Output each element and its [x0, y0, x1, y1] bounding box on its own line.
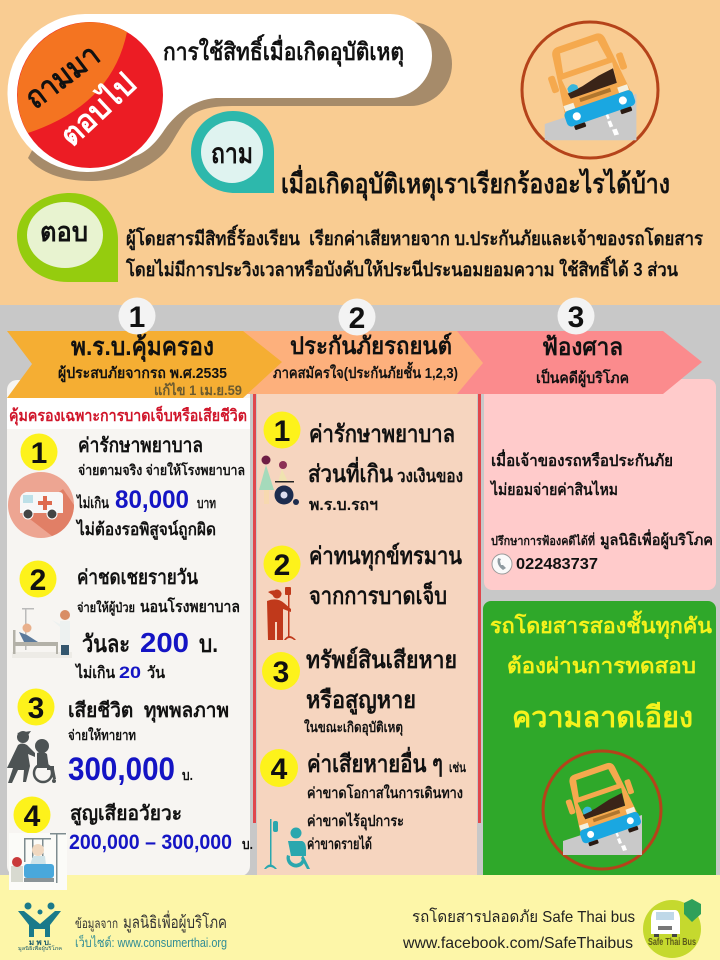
item 4 text: เช่น [449, 760, 466, 775]
item 1 text: ค่ารักษาพยาบาล [78, 435, 203, 457]
chevron: car insurance: ประกันภัยรถยนต์ [290, 332, 452, 360]
item 3 text: จ่ายให้ทายาท [68, 726, 136, 743]
item 3 text: หรือสูญหาย [306, 687, 416, 715]
item 4 text: ค่าเสียหายอื่น ๆ [307, 746, 443, 778]
item 2 text: 200 [140, 627, 189, 658]
item 1 number: 1 [274, 415, 290, 448]
item 3 number: 3 [28, 692, 44, 725]
chevron: protection act [7, 331, 282, 398]
icon: caregiver and wheelchair [7, 731, 56, 783]
top section background [0, 0, 720, 305]
source credit: มูลนิธิเพื่อผู้บริโภค [123, 910, 227, 933]
item 4 number [14, 796, 50, 834]
item 2 text: 20 [119, 663, 141, 682]
item 2 text [309, 542, 462, 610]
icon: patient with IV drip [267, 587, 296, 640]
chevron: protection act: ผู้ประสบภัยจากรถ พ.ศ.2535 [58, 365, 227, 383]
item 2 text: จ่ายให้ผู้ป่วย [77, 599, 135, 616]
number badge 2: 2 [349, 302, 365, 335]
number badge 1 [118, 298, 156, 334]
item 2 text: ค่าชดเชยรายวัน [77, 567, 198, 589]
campaign text: รถโดยสารปลอดภัย Safe Thai bus [412, 907, 635, 926]
foundation logo: ม พ บ. [29, 938, 51, 947]
item 3 text: ในขณะเกิดอุบัติเหตุ [304, 718, 403, 736]
item 4 text: ค่าขาดโอกาสในการเดินทาง [307, 783, 463, 802]
panel 3 content: 022483737 [516, 556, 598, 573]
item 3 text: บ. [182, 767, 193, 783]
panel 1 content [7, 398, 253, 854]
foundation logo [18, 902, 62, 952]
item 4 text: บ. [242, 836, 253, 852]
item 1 number: 1 [31, 437, 47, 470]
item 1 number [20, 434, 58, 470]
panel 3 content: มูลนิธิเพื่อผู้บริโภค [600, 529, 713, 550]
source credit: เว็บไซต์: www.consumerthai.org [75, 933, 227, 950]
item 1 text [75, 435, 245, 541]
item 1 text: พ.ร.บ.รถฯ [309, 497, 378, 514]
panel 3 content: เมื่อเจ้าของรถหรือประกันภัย [491, 449, 673, 470]
item 2 text: จากการบาดเจ็บ [309, 581, 447, 610]
number badge 3: 3 [568, 301, 584, 334]
item 2 number: 2 [30, 564, 46, 597]
item 4 text [307, 746, 466, 853]
item 3 text: ทรัพย์สินเสียหาย [306, 646, 457, 674]
icon: ambulance [8, 472, 74, 538]
item 4 number: 4 [271, 753, 288, 786]
chevron: court [440, 331, 702, 394]
item 1 number [264, 412, 300, 448]
item 1 text: ไม่เกิน [75, 493, 110, 512]
item 2 text: ไม่เกิน [74, 663, 115, 682]
icon: patient and doctor [12, 608, 72, 658]
icon: hospital bed patient [9, 833, 67, 890]
panel 1 red heading [7, 398, 250, 429]
answer pin icon [17, 193, 118, 282]
item 1 text: ส่วนที่เกิน [308, 456, 394, 488]
item 2 text: วัน [147, 664, 165, 682]
header speech bubble [7, 14, 452, 181]
number badge 2 [338, 298, 376, 336]
foundation logo: มูลนิธิเพื่อผู้บริโภค [18, 945, 62, 952]
chevron: court: เป็นคดีผู้บริโภค [536, 368, 629, 388]
item 4 text: 200,000 – 300,000 [69, 831, 232, 854]
green panel content: รถโดยสารสองชั้นทุกคัน [490, 610, 713, 640]
item 1 text: บาท [197, 495, 216, 511]
green panel content [490, 610, 713, 869]
panel 2 content [259, 412, 466, 869]
number badge 3 [558, 298, 594, 334]
chevron: car insurance: ภาคสมัครใจ(ประกันภัยชั้น 1,2,3) [273, 361, 458, 382]
question pin icon [191, 111, 274, 193]
item 1 text: 80,000 [115, 486, 189, 514]
label: question comes: ถามมา [18, 37, 106, 116]
item 1 text: ไม่ต้องรอพิสูจน์ถูกผิด [75, 519, 216, 541]
panel 1 red heading: คุ้มครองเฉพาะการบาดเจ็บหรือเสียชีวิต [9, 404, 247, 426]
item 3 number [18, 688, 54, 726]
item 2 number: 2 [274, 549, 290, 582]
middle section background [0, 305, 720, 876]
green panel content: ต้องผ่านการทดสอบ [507, 654, 696, 678]
item 2 text [74, 567, 240, 682]
item 4 text [69, 802, 253, 854]
Safe Thai Bus logo [643, 899, 701, 958]
label: answer goes: ตอบไป [52, 65, 143, 153]
item 3 text [68, 699, 229, 787]
number badge 1: 1 [129, 301, 145, 334]
panel backgrounds [7, 379, 716, 886]
panel 3 content: ไม่ยอมจ่ายค่าสินไหม [489, 480, 618, 499]
item 2 text: บ. [199, 631, 218, 658]
item 2 text: นอนโรงพยาบาล [140, 596, 240, 616]
item 3 number [262, 652, 300, 690]
panel 3 content: ปรึกษาการฟ้องคดีได้ที่ [491, 532, 595, 548]
chevron: protection act: พ.ร.บ.คุ้มครอง [71, 333, 214, 363]
item 2 number [264, 546, 300, 582]
chevron: car insurance [240, 331, 483, 394]
item 3 text: เสียชีวิต ทุพพลภาพ [68, 699, 229, 723]
item 1 text: วงเงินของ [397, 466, 463, 486]
item 1 text: จ่ายตามจริง จ่ายให้โรงพยาบาล [78, 461, 245, 478]
answer pin icon: ตอบ [40, 217, 88, 247]
item 2 text: วันละ [82, 631, 130, 658]
item 3 text: 300,000 [68, 751, 175, 787]
campaign text: www.facebook.com/SafeThaibus [402, 935, 633, 952]
header title: การใช้สิทธิ์เมื่อเกิดอุบัติเหตุ [163, 34, 404, 68]
source credit [75, 910, 227, 950]
item 4 text: ค่าขาดไร้อุปการะ [307, 811, 404, 831]
icon: tilting bus in circle [522, 22, 658, 158]
answer text [125, 224, 704, 281]
Safe Thai Bus logo: Safe Thai Bus [648, 937, 696, 948]
item 4 text: ค่าขาดรายได้ [307, 834, 372, 853]
source credit: ข้อมูลจาก [75, 916, 118, 932]
item 1 text: ค่ารักษาพยาบาล [309, 421, 455, 448]
campaign text [402, 907, 635, 952]
item 3 number: 3 [273, 656, 289, 689]
chevron: court: ฟ้องศาล [542, 334, 623, 361]
item 4 number [260, 749, 298, 787]
icon: teal wheelchair with IV [264, 819, 310, 869]
item 4 text: สูญเสียอวัยวะ [70, 802, 182, 827]
item 4 number: 4 [24, 800, 41, 833]
chevron: protection act: แก้ไข 1 เม.ย.59 [154, 381, 242, 398]
icon: phone [492, 554, 512, 574]
icon: flowers and wheelchair [259, 456, 299, 505]
item 1 text [308, 421, 463, 514]
green panel content: ความลาดเอียง [512, 702, 693, 734]
panel 3 content [489, 449, 713, 574]
icon: tilting bus in circle [543, 751, 661, 869]
footer [0, 875, 720, 960]
question pin icon: ถาม [211, 138, 253, 169]
item 2 text: ค่าทนทุกข์ทรมาน [309, 542, 462, 572]
red circle badge [17, 22, 163, 168]
item 2 number [20, 560, 56, 598]
item 3 text [304, 646, 457, 736]
